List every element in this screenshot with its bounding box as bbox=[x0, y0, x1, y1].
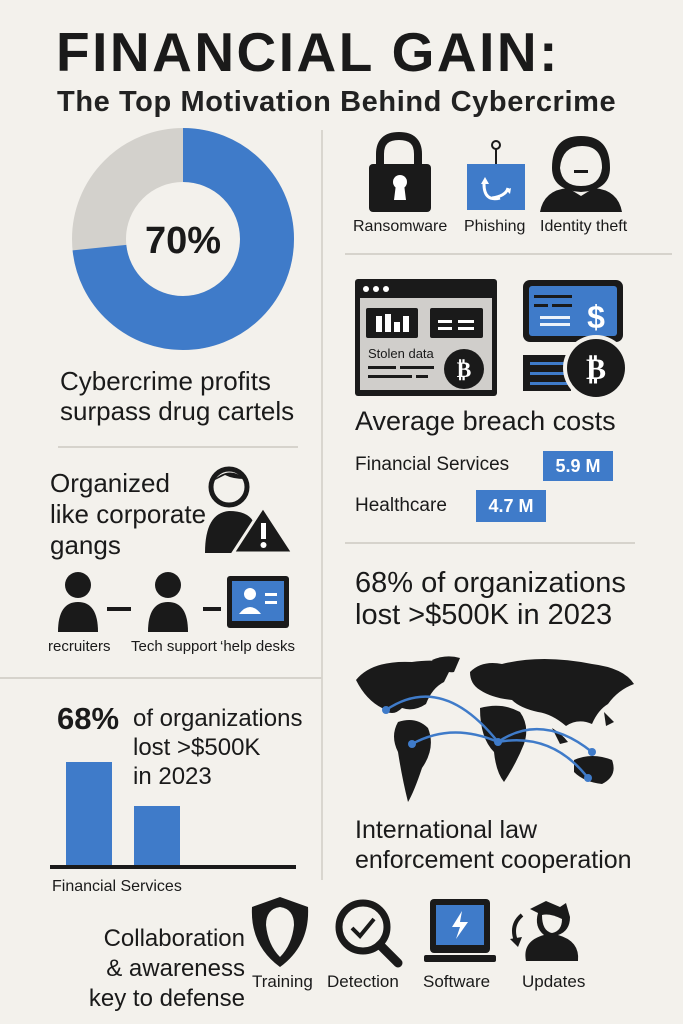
icons: threats bbox=[369, 132, 622, 212]
text: profits bbox=[60, 366, 294, 426]
text: of organizations bbox=[133, 705, 302, 732]
text: international cooperation bbox=[355, 816, 632, 874]
world map bbox=[356, 656, 634, 802]
donut chart bbox=[72, 128, 294, 350]
text: international cooperation: International law bbox=[355, 816, 537, 844]
text: Identity theft bbox=[540, 218, 627, 235]
text: collaboration: key to defense bbox=[89, 985, 245, 1012]
threat labels: Ransomware bbox=[353, 218, 447, 235]
text: Detection bbox=[327, 972, 399, 991]
text: organized: gangs bbox=[50, 530, 121, 560]
text: Phishing bbox=[464, 218, 525, 235]
text: ‘help desks bbox=[220, 638, 295, 655]
icon: payment card bitcoin: $ bbox=[587, 299, 605, 335]
cost: financial services: Financial Services bbox=[355, 454, 509, 475]
text: in 2023 bbox=[133, 763, 212, 790]
text: profits: Cybercrime profits bbox=[60, 366, 271, 396]
icon: person warning bbox=[205, 466, 290, 553]
stat: 68% right: lost >$500K in 2023 bbox=[355, 599, 612, 631]
stat: 68% left: 68% bbox=[57, 701, 119, 736]
text: organized: like corporate bbox=[50, 499, 206, 529]
text: Updates bbox=[522, 972, 585, 991]
text: organized: Organized bbox=[50, 468, 170, 498]
text: profits: surpass drug cartels bbox=[60, 396, 294, 426]
text: collaboration bbox=[89, 925, 245, 1012]
org chart row bbox=[58, 572, 289, 632]
defense icons bbox=[252, 897, 578, 968]
text: lost >$500K bbox=[133, 734, 260, 761]
icon: stolen data browser: Stolen data bbox=[368, 346, 435, 361]
text: Tech support bbox=[131, 638, 217, 655]
stat: 68% right: 68% of organizations bbox=[355, 567, 626, 599]
org labels: recruiters bbox=[48, 638, 111, 655]
text: 4.7 M bbox=[488, 496, 534, 516]
subtitle: The Top Motivation Behind Cybercrime bbox=[57, 86, 616, 118]
heading: breach costs: Average breach costs bbox=[355, 406, 616, 436]
title: FINANCIAL GAIN: bbox=[56, 21, 560, 83]
text: organized bbox=[50, 468, 206, 560]
stat: 68% right bbox=[355, 567, 626, 631]
bar chart bbox=[50, 762, 296, 869]
text: collaboration: Collaboration bbox=[104, 925, 245, 952]
defense labels: Training bbox=[252, 972, 313, 991]
text: Financial Services bbox=[52, 878, 182, 895]
text: 5.9 M bbox=[555, 456, 601, 476]
icon: stolen data browser: ₿ bbox=[457, 358, 472, 383]
icon: payment card bitcoin bbox=[523, 280, 625, 397]
text: Software bbox=[423, 972, 490, 991]
text: international cooperation: enforcement cooperation bbox=[355, 846, 632, 874]
cost: healthcare: Healthcare bbox=[355, 495, 447, 516]
text: collaboration: & awareness bbox=[106, 955, 245, 982]
icon: stolen data browser bbox=[355, 279, 497, 396]
icon: payment card bitcoin: ₿ bbox=[586, 352, 606, 387]
donut chart: 70% bbox=[145, 220, 221, 262]
